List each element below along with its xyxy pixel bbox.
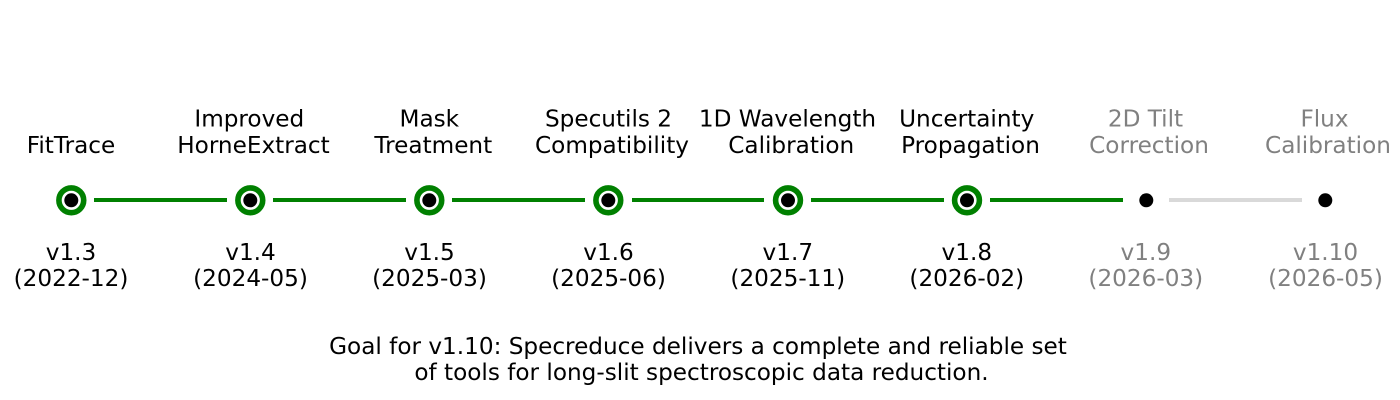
planned feature labels: 2D Tilt	[1108, 106, 1183, 132]
feature labels: Treatment	[373, 133, 492, 159]
feature labels: Uncertainty	[899, 106, 1034, 132]
version and date labels: (2025-03)	[372, 266, 487, 292]
feature labels: 1D Wavelength	[699, 106, 876, 132]
planned version and date labels: v1.9	[1121, 240, 1171, 266]
goal statement	[329, 334, 1067, 386]
feature labels: Improved	[194, 106, 304, 132]
version and date labels: (2025-11)	[730, 266, 845, 292]
version and date labels: v1.3	[46, 240, 96, 266]
version and date labels	[14, 240, 1024, 292]
feature labels: Specutils 2	[545, 106, 672, 132]
feature labels: Calibration	[728, 133, 854, 159]
goal statement: of tools for long-slit spectroscopic data reduction.	[414, 360, 989, 386]
version and date labels: (2025-06)	[551, 266, 666, 292]
version and date labels: v1.7	[763, 240, 813, 266]
version and date labels: (2022-12)	[14, 266, 128, 292]
goal statement: Goal for v1.10: Specreduce delivers a complete and reliable set	[329, 334, 1067, 360]
feature labels: Mask	[399, 106, 460, 132]
connector lines	[94, 198, 1302, 202]
version and date labels: v1.5	[404, 240, 455, 266]
version and date labels: (2024-05)	[193, 266, 308, 292]
planned feature labels: Calibration	[1265, 133, 1391, 159]
feature labels: FitTrace	[27, 133, 115, 159]
feature labels: HorneExtract	[177, 133, 330, 159]
planned version and date labels	[1088, 240, 1383, 292]
planned feature labels: Correction	[1089, 133, 1209, 159]
version and date labels: v1.4	[225, 240, 276, 266]
version and date labels: v1.6	[583, 240, 634, 266]
feature labels: Propagation	[901, 133, 1040, 159]
version and date labels: (2026-02)	[909, 266, 1024, 292]
planned version and date labels: v1.10	[1293, 240, 1358, 266]
planned version and date labels: (2026-05)	[1268, 266, 1383, 292]
planned milestone markers	[1139, 193, 1332, 207]
planned version and date labels: (2026-03)	[1088, 266, 1203, 292]
planned feature labels: Flux	[1300, 106, 1349, 132]
feature labels	[27, 106, 1040, 159]
planned feature labels	[1089, 106, 1391, 159]
completed milestone markers	[59, 188, 979, 213]
feature labels: Compatibility	[535, 133, 689, 159]
version and date labels: v1.8	[942, 240, 992, 266]
